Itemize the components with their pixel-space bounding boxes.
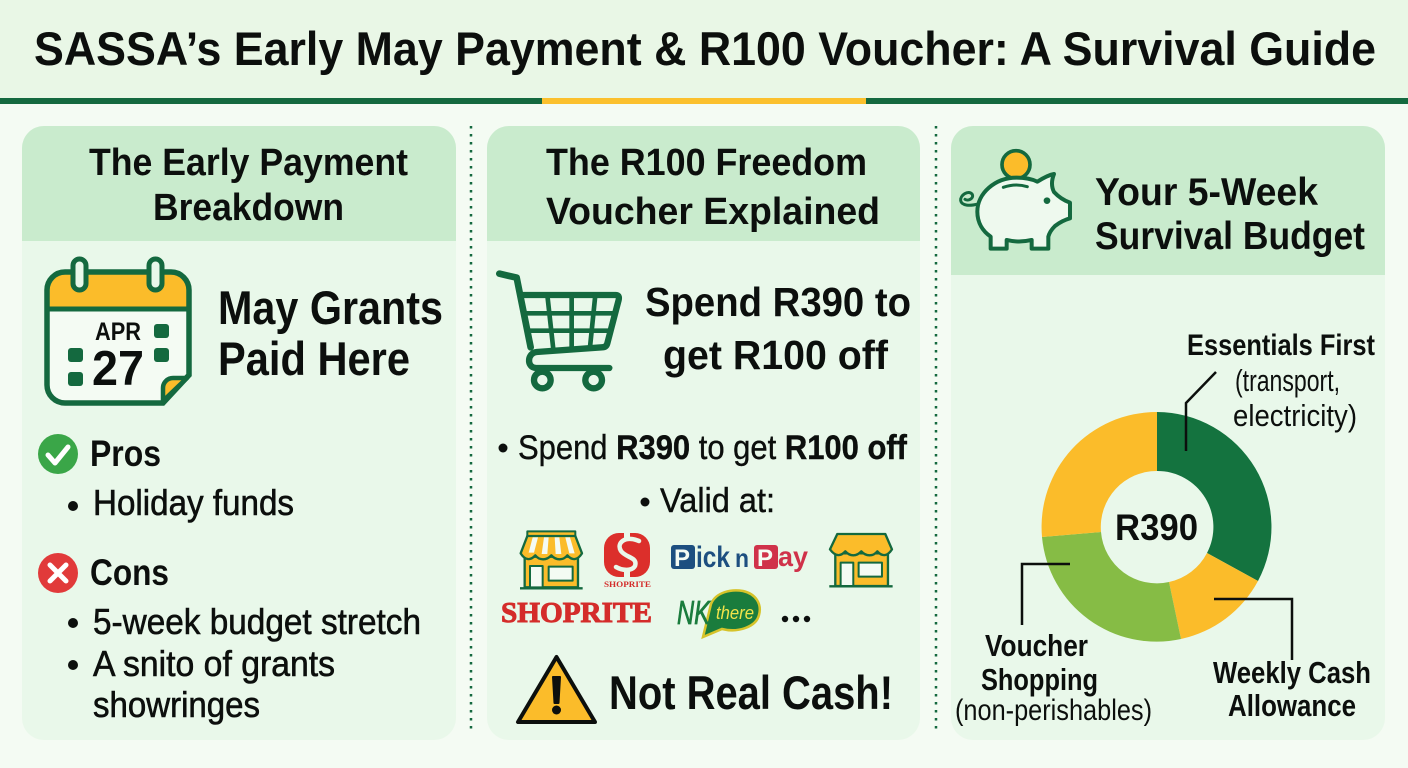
segment: voucher shopping	[1042, 532, 1181, 642]
logo: pick n pay: n	[735, 543, 749, 573]
callout: may grants paid here	[218, 281, 443, 385]
icon: striped store	[520, 531, 583, 588]
donut chart	[1042, 412, 1271, 642]
more stores ellipsis	[782, 616, 810, 622]
logo: pick n pay: P	[757, 545, 773, 572]
logo: pick n pay: ick	[696, 541, 730, 574]
icon: calendar	[47, 259, 189, 403]
icon: calendar: APR	[95, 318, 141, 346]
callout: spend to save	[645, 279, 911, 378]
pros list: Holiday funds	[93, 482, 294, 523]
cons list: 5-week budget stretch	[93, 601, 421, 642]
panel: survival budget	[951, 126, 1385, 740]
icon: piggy bank	[961, 151, 1070, 249]
panel heading: voucher: Voucher Explained	[546, 191, 880, 233]
panel heading: voucher: The R100 Freedom	[546, 142, 867, 184]
panel heading: voucher	[546, 142, 880, 233]
panel heading: early payment: Breakdown	[153, 187, 344, 229]
callout: spend to save: Spend R390 to	[645, 279, 911, 325]
bullet: spend R390: Spend R390 to get R100 off	[518, 429, 908, 467]
label: essentials first: electricity)	[1233, 398, 1357, 433]
callout: may grants paid here: May Grants	[218, 281, 443, 334]
label: essentials first: Essentials First	[1187, 329, 1375, 362]
panel heading: early payment: The Early Payment	[89, 142, 408, 184]
bullet: valid at: Valid at:	[660, 482, 775, 520]
panel heading: early payment	[89, 142, 408, 229]
heading: pros: Pros	[90, 433, 161, 474]
title: SASSA’s Early May Payment & R100 Voucher: A Survival Guide	[34, 22, 1376, 75]
logo: pick n pay: ay	[778, 541, 808, 572]
logo: pick n pay: P	[674, 545, 690, 572]
segment: yellow remainder	[1042, 412, 1157, 537]
icon: green check	[38, 434, 78, 474]
logo: shoprite wordmark: SHOPRITE	[501, 597, 652, 629]
panel heading: budget: Your 5-Week	[1095, 171, 1318, 214]
cons list: A snito of grants	[93, 643, 335, 684]
icon: plain store	[829, 534, 893, 586]
icon: calendar: 27	[92, 342, 144, 396]
logo: shoprite emblem: SHOPRITE	[604, 580, 651, 589]
label: voucher shopping: (non-perishables)	[955, 694, 1152, 727]
label: weekly cash allowance: Weekly Cash	[1213, 655, 1371, 690]
header band	[0, 0, 1408, 104]
logo: nk there: there	[716, 603, 754, 623]
panel: early payment breakdown	[22, 126, 456, 740]
logo: nk there	[677, 590, 760, 637]
panel heading: budget	[1095, 171, 1365, 258]
panel: R100 freedom voucher	[487, 126, 920, 740]
warning: not real cash: Not Real Cash!	[609, 666, 893, 719]
label: voucher shopping: Voucher	[985, 628, 1088, 663]
donut centre value: R390	[1115, 507, 1198, 548]
segment: essentials	[1157, 412, 1271, 581]
icon: shopping cart	[499, 274, 619, 388]
callout: may grants paid here: Paid Here	[218, 332, 410, 385]
callout: spend to save: get R100 off	[663, 332, 888, 378]
label: voucher shopping: Shopping	[981, 662, 1098, 697]
label: voucher shopping	[955, 564, 1152, 727]
icon: warning triangle	[518, 657, 595, 722]
logo: pick n pay	[671, 541, 808, 574]
logo: nk there: NK	[677, 594, 711, 631]
label: essentials first	[1186, 329, 1375, 451]
label: essentials first: (transport,	[1235, 363, 1340, 398]
icon: red cross	[38, 553, 78, 593]
heading: cons: Cons	[90, 552, 169, 593]
cons list	[68, 601, 421, 725]
label: weekly cash allowance	[1213, 599, 1371, 723]
logo: shoprite emblem	[604, 531, 651, 589]
segment: weekly cash	[1169, 553, 1258, 639]
panel heading: budget: Survival Budget	[1095, 215, 1365, 258]
cons list: showringes	[93, 684, 260, 725]
label: weekly cash allowance: Allowance	[1228, 688, 1356, 723]
